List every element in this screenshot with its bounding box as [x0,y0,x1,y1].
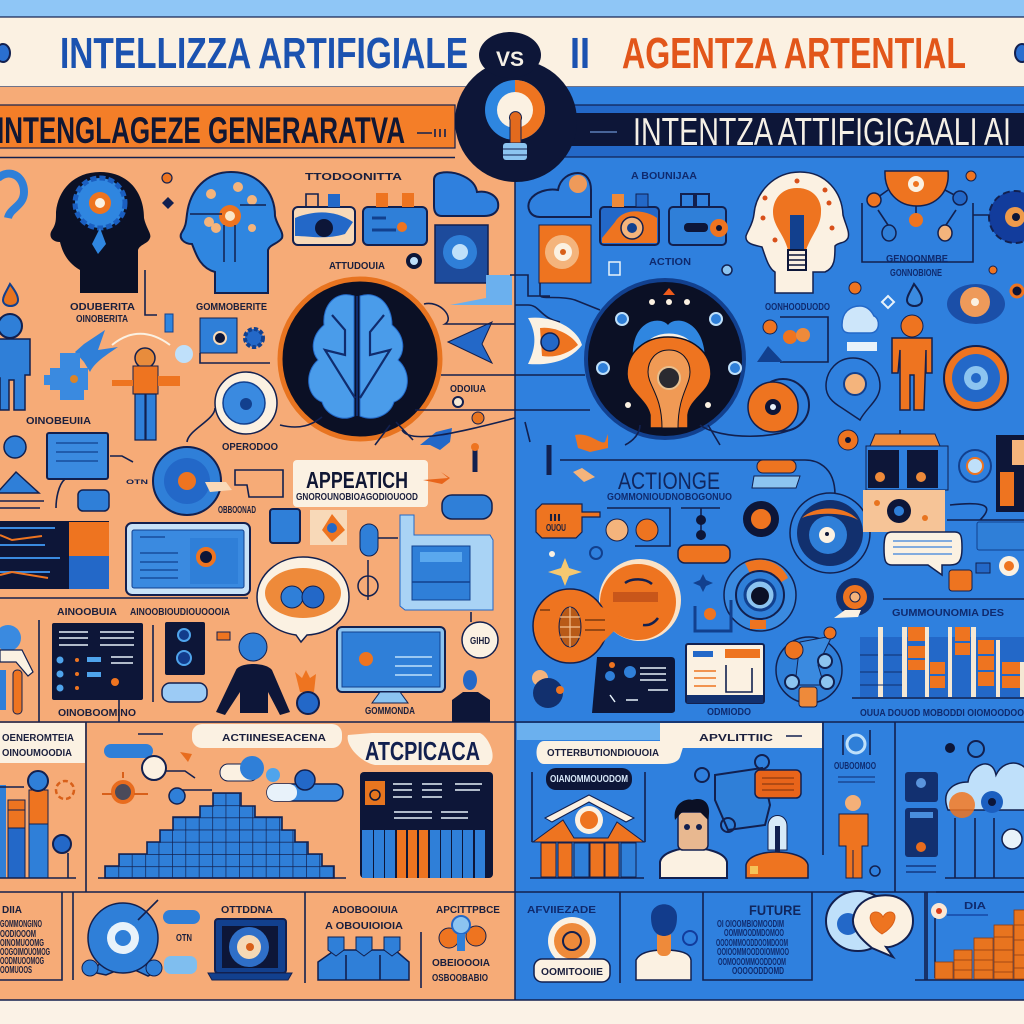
captions: AINOOBUIA [57,607,117,618]
icon: dark tile [435,225,488,283]
cloud highlight [569,175,587,193]
icon: gear [989,191,1024,243]
chip [104,744,153,758]
icon: blue network person [0,436,39,493]
icon: cream dot [549,551,555,557]
icon: small bracket [695,600,731,631]
right bottom: small panels [905,772,938,872]
icon: drop [3,284,18,306]
icon: top small orange [989,266,997,274]
caption: GOMMONDA [365,706,415,717]
right bottom: caption ribbons [517,723,822,764]
left bottom row: three figures: A OBOUIOIOIA [325,921,403,932]
icon: camera [600,194,659,245]
left bottom row: laptop [208,905,292,980]
blob chain [220,756,280,782]
icon: gear [245,329,263,347]
right row 3 icons [525,422,1024,591]
orange chip [217,632,230,640]
icon: small lens [408,255,420,267]
icon: orange dot [849,282,861,294]
caption: GOMMOBERITE [196,302,267,313]
icon: orange person [892,315,932,410]
small disc with flame [295,670,319,714]
left bottom: caption ribbon [192,724,342,748]
left row 4 icons [0,509,493,642]
right bottom: caption ribbons: OTTERBUTIONDIOUOIA [547,748,659,759]
icon: sparkle [882,296,894,308]
outlined tag [235,470,283,497]
right bottom: woman [746,816,808,878]
top chips [752,460,800,488]
left row 3 icons [0,433,492,519]
orange tile [949,570,972,591]
rule [883,598,1024,600]
left bottom: cream caption [0,723,85,763]
central brain circle [280,279,440,439]
dark panel [52,623,143,700]
left decorative dot [0,44,10,62]
caption: actionge: ACTIONGE [618,468,720,495]
caption: GUMMOUNOMIA DES [892,608,1004,619]
title left: INTELLIZZA ARTIFIGIALE [60,29,468,78]
dark screen [592,657,675,713]
callout: approach: GNOROUNOBIOAGODIOUOOD [296,492,418,503]
icon tiles [270,509,398,600]
icon: pixel cluster [44,353,88,400]
small network [681,508,720,540]
small orbs [532,670,564,708]
VS lightbulb badge: VS [496,48,524,71]
left bottom row: text block: OINOMUOOMG [0,938,44,949]
left bottom row: text block: OOGOIMOUOMOG [0,947,50,958]
dark orange node [747,505,775,533]
right row 4 icons [532,547,1024,719]
left bottom row: key icon: OSBOOBABIO [432,973,488,984]
icon: small ring [162,173,172,183]
orange fish [575,434,608,452]
callout: approach [293,460,428,507]
left bottom: ATCPICACA callout [348,733,493,766]
icon: orange node [472,412,484,424]
icon: ringed lens [790,493,870,573]
caption: ODUBERITA [70,302,135,313]
heading band left [0,105,455,158]
icon: blue bird [420,428,452,450]
left bottom row: text block: DIIA [2,905,22,916]
icon: small tile [200,318,237,353]
icon: target disc [215,372,277,434]
device [165,622,205,675]
right bottom row: hooded figure [636,904,697,980]
section grid lines [0,700,1024,1000]
right bottom: pin and orange figure: OUBOOMOO [834,761,876,772]
left row 2 icons [0,270,512,453]
small chips [423,443,492,519]
right bottom row: staircase chart: DIA [964,901,986,912]
frame lines [947,504,1024,520]
right bottom row: future text box: OOIOOMMOODOIOMMOO [717,947,789,958]
dark figure silhouette [452,670,490,722]
small tile [165,314,173,332]
icon: light band [450,275,512,305]
icon: big eye lens [724,559,796,631]
right bottom: caption ribbons: APVLITTIIC [699,733,773,744]
document [757,317,828,362]
ring [959,450,991,482]
network [776,627,842,707]
small flame [180,752,192,762]
left bottom row: key icon: APCITTPBCE [436,905,500,916]
small figure [546,445,552,475]
icon: blue figure [0,625,33,714]
caption: ODMIODO [707,707,751,718]
right row 2 icons [510,266,1023,432]
chat box [47,433,108,479]
pill node [267,770,343,801]
left bottom: bar chart [0,771,76,878]
small tile [78,490,109,511]
right bottom: pin and orange figure [834,730,880,878]
connector frame [525,422,900,495]
cream coin [999,556,1019,576]
icon: small ring [722,265,732,275]
right bottom row: future text box: FUTURE [749,902,801,918]
icon: small cloud [842,306,878,333]
icon: bulb head [746,172,849,293]
right bottom row: staircase chart [915,892,1024,980]
caption: OPERODOO [222,442,278,453]
right bottom: house [530,768,645,878]
small tile [976,563,990,573]
icon: radar device [153,447,232,515]
caption: OBBOONAD [218,505,256,516]
VS lightbulb badge [455,32,577,182]
icon: chat coin [826,358,880,420]
right row 1 icons [528,171,1024,293]
caption: OINOBERITA [76,314,128,325]
right bottom: cloud system [945,741,1024,878]
left bottom: ATCPICACA callout: ATCPICACA [365,736,480,766]
right bottom row: future text box: OI OIOOMBIOMOODIM [717,919,784,930]
side device [996,435,1024,512]
icon: camera [293,194,355,245]
left bottom row: key icon [421,905,500,988]
circle node [142,756,166,780]
monitor [337,627,445,703]
vertical rule [39,620,153,722]
caption: TTODOONITTA [305,172,402,183]
monitor [126,523,250,595]
window [686,644,764,703]
left row 1 icons [0,172,498,293]
label chip [847,342,877,351]
caption: A BOUNIJAA [631,171,697,182]
right bottom: house: OIANOMMOUODOM [550,774,628,785]
icon: eye shape [448,322,492,363]
folder [400,515,493,610]
left bottom: flow of icons [102,734,343,804]
icon: dark star [693,574,713,592]
left panel background [0,87,515,1000]
oval label [462,612,498,658]
icon: orange lobes [533,559,681,663]
right bottom row: future text box [716,902,801,977]
left row 5 icons [0,598,498,722]
right bottom row: future text box: OOOOMMOODDOOMDOOM [716,938,788,949]
right bottom row: affordable badge: OOMITOOIIE [541,967,603,978]
caption: OONHOODUODO [765,302,830,313]
orange chip [678,545,730,563]
divider [0,597,248,599]
caption: actionge: GOMMONIOUDNOBOGONUO [607,492,732,503]
icon: diamond [162,197,174,209]
icon: device [363,193,427,245]
dark screen [0,521,109,589]
orange tag: OUOU [546,523,566,534]
caption: OINOBOOMINO [58,708,136,719]
bracket [145,270,157,315]
left bottom: cream caption: OENEROMTEIA [2,733,74,744]
left bottom row: gear hub icon [82,900,162,976]
drop box [607,508,670,546]
left bottom row: laptop: OTTDDNA [221,905,273,916]
inner ring [967,458,983,474]
callout: approach: APPEATICH [306,467,408,493]
caption: OINOBEUIIA [26,416,91,427]
icon: orange eye [528,318,582,364]
left bottom: dashboard [360,772,493,878]
icon: device [669,194,728,245]
orange drops [606,519,658,541]
right bottom: network bear [695,755,801,832]
left bottom: caption ribbon: ACTIINESEACENA [222,733,326,744]
speaker rack [863,434,948,532]
oval label: GIHD [470,636,490,647]
left bottom row: text block: GOMMONGINO [0,919,42,930]
heading band right [550,105,1024,157]
right panel background [515,87,1024,1000]
blue note box [977,522,1024,550]
icon: ring [590,547,602,559]
connector [138,734,212,790]
right decorative dot [1015,44,1024,62]
left bottom row: text block: OOMUOOS [0,965,32,976]
icon: orange disc [748,379,809,432]
left bottom row: text block: OODIOOOM [0,929,36,940]
icon: cloud [528,173,591,217]
pyramid baseline [98,877,346,879]
left bottom row: key icon: OBEIOOOIA [432,958,490,969]
orange tag: III [549,513,561,524]
icon: orange coin [834,578,874,618]
caption: actionge [607,468,732,503]
right bottom: man [660,799,727,878]
left bottom: cream caption: OINOUMOODIA [2,748,72,759]
caption lines [0,501,44,508]
connector lines across the centre [187,303,590,445]
caption: GENOONMBE [886,254,948,265]
caption: GONNOBIONE [890,268,942,279]
icon: gear glow [947,284,1005,324]
right bottom row: future text box: OOMMOODMDOMOO [724,928,784,939]
icon: blue head [181,172,282,293]
left bottom row: three figures [318,905,409,980]
right bottom row: affordable badge: AFVIIEZADE [527,905,596,916]
right bottom row: future text box: OOMOOOMMOODDOOM [718,957,786,968]
icon: eye node [453,397,463,407]
central agent circle [586,280,744,438]
left bottom row: chips: OTN [176,933,192,944]
sky band [0,0,1024,17]
heading band left: INTENGLAGEZE GENERARATVA [0,110,405,151]
icon: drop [907,284,922,306]
bar band [852,627,1024,698]
icon: orange figure [112,348,180,440]
left bottom row: chips [163,910,200,974]
icon: dome network [862,171,990,262]
chat curve [56,456,133,508]
left bottom row: three figures: ADOBOOIUIA [332,905,398,916]
right bottom row: affordable badge [527,905,610,982]
sun icon [102,772,148,802]
icon: orange tile [539,225,591,283]
icon: right ring [1011,285,1023,297]
connector tile lines [510,275,600,310]
tile connector [200,353,270,363]
chat bubble [884,532,962,575]
caption: ATTUDOUIA [329,261,385,272]
dark figure [216,633,290,715]
left bottom row: text block: OODMUOOMOG [0,956,44,967]
speech bubble [257,557,349,642]
orange disc [838,430,858,450]
icon: question mark [0,174,24,218]
caption: ACTION [649,257,691,268]
icon: black head with gear [50,172,150,293]
caption: AINOOBIOUDIOUOOOIA [130,607,230,618]
left bottom: pyramid chart [105,793,334,878]
icon: small doc [609,262,620,275]
caption: OTN [126,480,148,486]
caption: ODOIUA [450,384,486,395]
orange tag [536,504,600,538]
left bottom row: text block [0,905,50,976]
small tag [573,468,595,482]
title bar [0,17,1024,87]
icon: blue person [0,314,30,410]
right bottom row: speech bubbles [826,891,913,957]
icon: curved arrow [75,330,193,372]
blue node [169,788,185,804]
icon: cloud [434,172,498,216]
right bottom row: future text box: OOOOODDOMD [732,966,784,977]
icon: star [548,558,582,586]
icon: orange ring [944,346,1008,410]
title separator: II [570,29,590,78]
chip [162,683,207,702]
footer band [0,1000,1024,1024]
panel divider [514,157,516,1000]
